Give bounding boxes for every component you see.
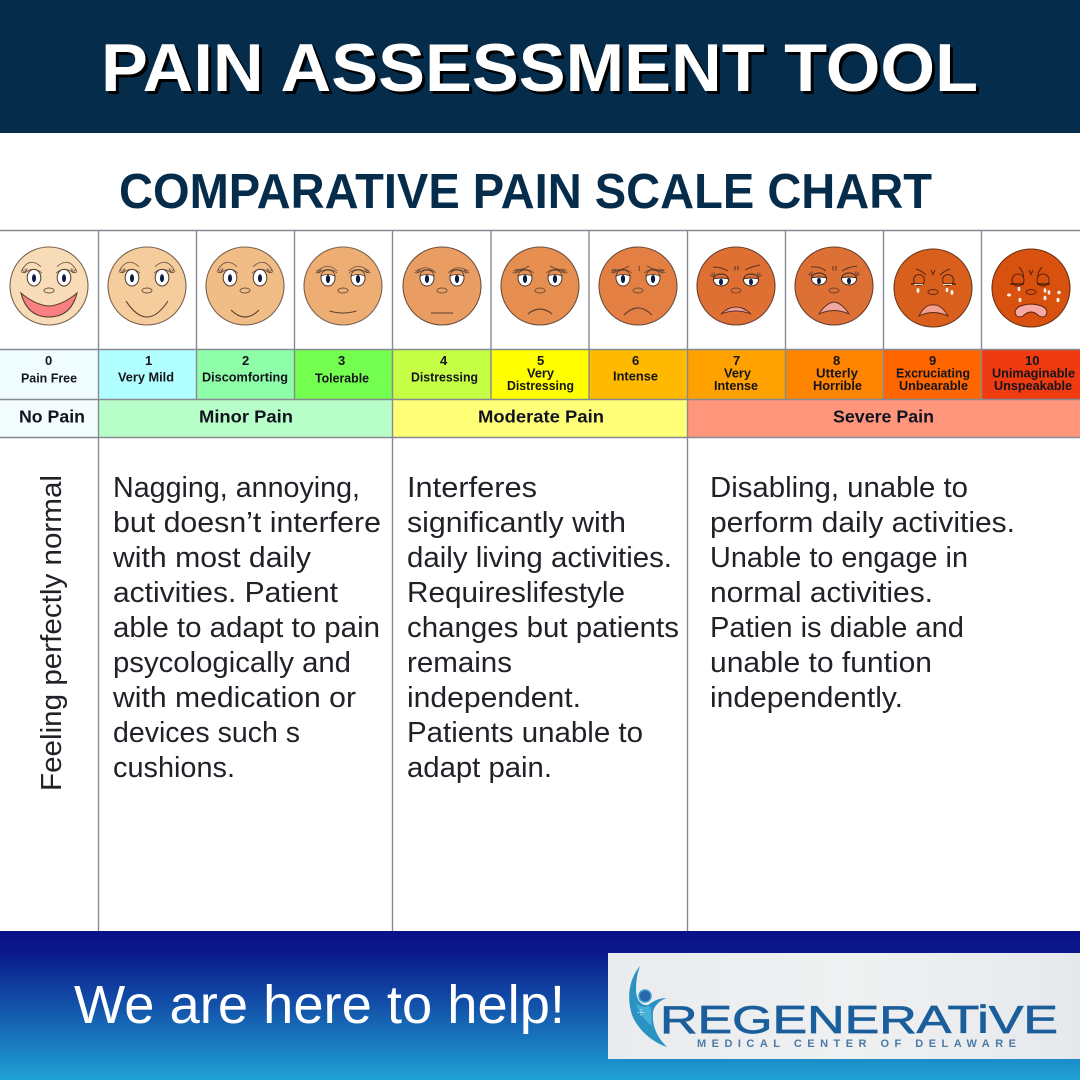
category: severe pain: Severe Pain (833, 406, 934, 426)
scale label 5: Very (527, 366, 555, 380)
face 5: very distressing (501, 247, 579, 325)
scale label 2: Discomforting (202, 370, 288, 384)
moderate pain description: remains (407, 647, 512, 679)
minor pain description: cushions. (113, 752, 235, 784)
no pain vertical description: Feeling perfectly normal (36, 475, 68, 791)
scale label 1: Very Mild (118, 370, 174, 384)
minor pain description: Nagging, annoying, (113, 472, 360, 504)
scale label 6: Intense (613, 368, 658, 384)
subtitle: COMPARATIVE PAIN SCALE CHART (119, 165, 932, 219)
severe pain description: normal activities. (710, 577, 933, 609)
minor pain description: with medication or (112, 682, 356, 714)
scale label 6 (613, 353, 658, 384)
scale label 0: Pain Free (21, 370, 77, 386)
scale label 4: Distressing (411, 370, 478, 384)
moderate pain description: Requireslifestyle (407, 577, 625, 609)
footer band (0, 931, 1080, 1080)
face 1: very mild (108, 247, 186, 325)
face 9: excruciating (894, 249, 972, 327)
scale label 4: 4 (440, 353, 448, 368)
category: no pain: No Pain (19, 406, 85, 426)
scale label 3 (315, 353, 369, 386)
moderate pain description: independent. (407, 682, 581, 714)
scale label 10: 10 (1025, 353, 1039, 368)
scale label 3: Tolerable (315, 370, 369, 386)
moderate pain description: Patients unable to (407, 717, 643, 749)
face 4: distressing (403, 247, 481, 325)
scale label 0: 0 (45, 353, 52, 368)
logo panel (608, 953, 1080, 1059)
scale label 8: Utterly (816, 366, 859, 380)
minor pain description (112, 472, 381, 784)
moderate pain description: daily living activities. (407, 542, 672, 574)
severe pain description: perform daily activities. (710, 507, 1015, 539)
severe pain description: independently. (710, 682, 903, 714)
minor pain description: but doesn’t interfere (113, 507, 381, 539)
scale label 9: 9 (929, 353, 936, 368)
moderate pain description (407, 472, 679, 784)
scale label 8 (813, 353, 862, 393)
logo tagline: MEDICAL CENTER OF DELAWARE (697, 1038, 1016, 1050)
logo wordmark: REGENERATiVE (660, 999, 1058, 1042)
face 7: very intense (697, 247, 775, 325)
minor pain description: with most daily (112, 542, 312, 574)
scale label 9: Excruciating (896, 366, 970, 380)
face 2: discomforting (206, 247, 284, 325)
scale label 10 (992, 353, 1075, 393)
category: minor pain: Minor Pain (199, 406, 293, 426)
severe pain description: Patien is diable and (710, 612, 964, 644)
scale label 10: Unspeakable (994, 378, 1072, 393)
severe pain description: Unable to engage in (710, 542, 968, 574)
scale label 7: Very (724, 366, 752, 380)
scale label 5: 5 (537, 353, 544, 368)
minor pain description: devices such s (113, 717, 300, 749)
category: moderate pain: Moderate Pain (478, 406, 604, 426)
pain category bands (0, 399, 1080, 437)
face 0: pain free (10, 247, 88, 325)
scale label 6: 6 (632, 353, 639, 368)
scale label 8: 8 (833, 353, 840, 368)
title: PAIN ASSESSMENT TOOL (101, 30, 978, 106)
scale label 0 (21, 353, 77, 386)
scale label 7: Intense (714, 378, 758, 393)
icon: logo figure (629, 966, 667, 1047)
scale label 5: Distressing (507, 378, 574, 393)
minor pain description: activities. Patient (113, 577, 338, 609)
header band (0, 0, 1080, 133)
scale label 2 (202, 353, 288, 384)
minor pain description: psycologically and (113, 647, 351, 679)
scale label 1 (118, 353, 174, 384)
moderate pain description: Interferes (407, 472, 537, 504)
severe pain description: unable to funtion (710, 647, 932, 679)
moderate pain description: changes but patients (407, 612, 679, 644)
moderate pain description: significantly with (407, 507, 626, 539)
table grid lines (0, 230, 1080, 931)
severe pain description: Disabling, unable to (710, 472, 968, 504)
face 8: utterly horrible (795, 247, 873, 325)
scale label 10: Unimaginable (992, 366, 1075, 380)
scale label 7: 7 (733, 353, 740, 368)
scale label 1: 1 (145, 353, 152, 368)
scale label 3: 3 (338, 353, 345, 368)
moderate pain description: adapt pain. (407, 752, 552, 784)
face 3: tolerable (304, 247, 382, 325)
scale label 9 (896, 353, 970, 393)
scale label 9: Unbearable (899, 378, 968, 393)
minor pain description: able to adapt to pain (113, 612, 380, 644)
pain scale colour cells (0, 349, 1080, 399)
footer message: We are here to help! (74, 975, 565, 1035)
face 6: intense (599, 247, 677, 325)
severe pain description (710, 472, 1015, 714)
scale label 7 (714, 353, 758, 393)
face 10: unimaginable (992, 249, 1070, 327)
scale label 5 (507, 353, 574, 393)
scale label 2: 2 (242, 353, 249, 368)
scale label 8: Horrible (813, 378, 862, 393)
scale label 4 (411, 353, 478, 384)
